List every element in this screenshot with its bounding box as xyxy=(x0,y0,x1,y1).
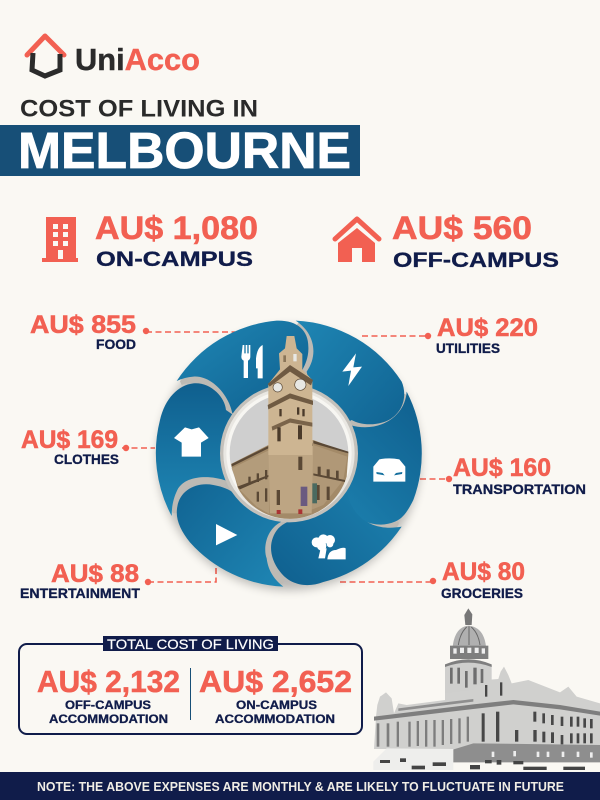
label: clothes xyxy=(21,426,119,467)
footer note xyxy=(0,772,600,800)
label: entertainment xyxy=(20,560,141,601)
logo: UniAcco xyxy=(27,36,200,77)
label: groceries: GROCERIES xyxy=(441,586,523,601)
label: transportation xyxy=(453,454,586,497)
icon: office building xyxy=(42,217,78,262)
on-campus summary: ON-CAMPUS xyxy=(96,248,253,271)
label: food xyxy=(30,311,136,352)
title xyxy=(0,96,360,179)
icon: fork and knife xyxy=(241,345,263,378)
title: MELBOURNE xyxy=(18,122,351,179)
total: on-campus: AU$ 2,652 xyxy=(199,664,352,699)
off-campus summary xyxy=(335,210,559,272)
segment: clothes xyxy=(156,383,289,516)
icon: house xyxy=(335,219,379,262)
label: entertainment: AU$ 88 xyxy=(51,560,139,588)
label: entertainment: ENTERTAINMENT xyxy=(20,586,141,601)
logo: UniAcco: UniAcco xyxy=(75,42,200,77)
illustration: parliament building engraving xyxy=(373,608,600,770)
icon: play button xyxy=(216,524,237,545)
label: transportation: AU$ 160 xyxy=(453,454,551,482)
icon: car xyxy=(373,458,405,482)
title: COST OF LIVING IN xyxy=(20,96,258,122)
segment: transportation xyxy=(289,392,422,525)
off-campus summary: OFF-CAMPUS xyxy=(393,249,559,272)
total: off-campus: ACCOMMODATION xyxy=(49,712,168,726)
icon: lightning bolt xyxy=(342,353,362,386)
footer note: NOTE: THE ABOVE EXPENSES ARE MONTHLY & ARE LIKELY TO FLUCTUATE IN FUTURE xyxy=(37,779,564,794)
panel: total cost of living xyxy=(19,636,362,734)
segment: groceries xyxy=(271,453,402,585)
segment: utilities xyxy=(289,321,404,453)
label: food: FOOD xyxy=(96,337,136,352)
icon: broccoli and apple xyxy=(312,534,346,559)
label: utilities: AU$ 220 xyxy=(437,314,538,342)
donut chart of expenses xyxy=(156,321,422,590)
total: on-campus xyxy=(199,664,352,726)
label: utilities: UTILITIES xyxy=(436,341,500,356)
label: clothes: CLOTHES xyxy=(54,452,119,467)
total: off-campus xyxy=(37,664,180,726)
label: food: AU$ 855 xyxy=(30,311,136,339)
on-campus summary xyxy=(42,210,258,271)
label: groceries xyxy=(441,558,525,601)
photo: clock tower building xyxy=(230,394,348,519)
on-campus summary: AU$ 1,080 xyxy=(95,210,258,246)
center photo ring xyxy=(220,384,358,522)
total: on-campus: ACCOMMODATION xyxy=(215,712,335,726)
connector lines xyxy=(122,328,452,585)
label: utilities xyxy=(436,314,538,356)
label: groceries: AU$ 80 xyxy=(442,558,525,586)
segment: entertainment xyxy=(177,453,289,587)
total: off-campus: AU$ 2,132 xyxy=(37,664,180,699)
off-campus summary: AU$ 560 xyxy=(392,210,532,246)
label: clothes: AU$ 169 xyxy=(21,426,118,454)
icon: t-shirt xyxy=(174,427,209,457)
segment: food xyxy=(177,321,308,413)
total: off-campus: OFF-CAMPUS xyxy=(65,698,151,712)
total: on-campus: ON-CAMPUS xyxy=(236,698,317,712)
heading tab: TOTAL COST OF LIVING xyxy=(107,636,274,652)
grey swirl edges xyxy=(172,323,406,527)
label: transportation: TRANSPORTATION xyxy=(453,482,586,497)
photo: clock tower top overlapping donut xyxy=(268,336,313,455)
